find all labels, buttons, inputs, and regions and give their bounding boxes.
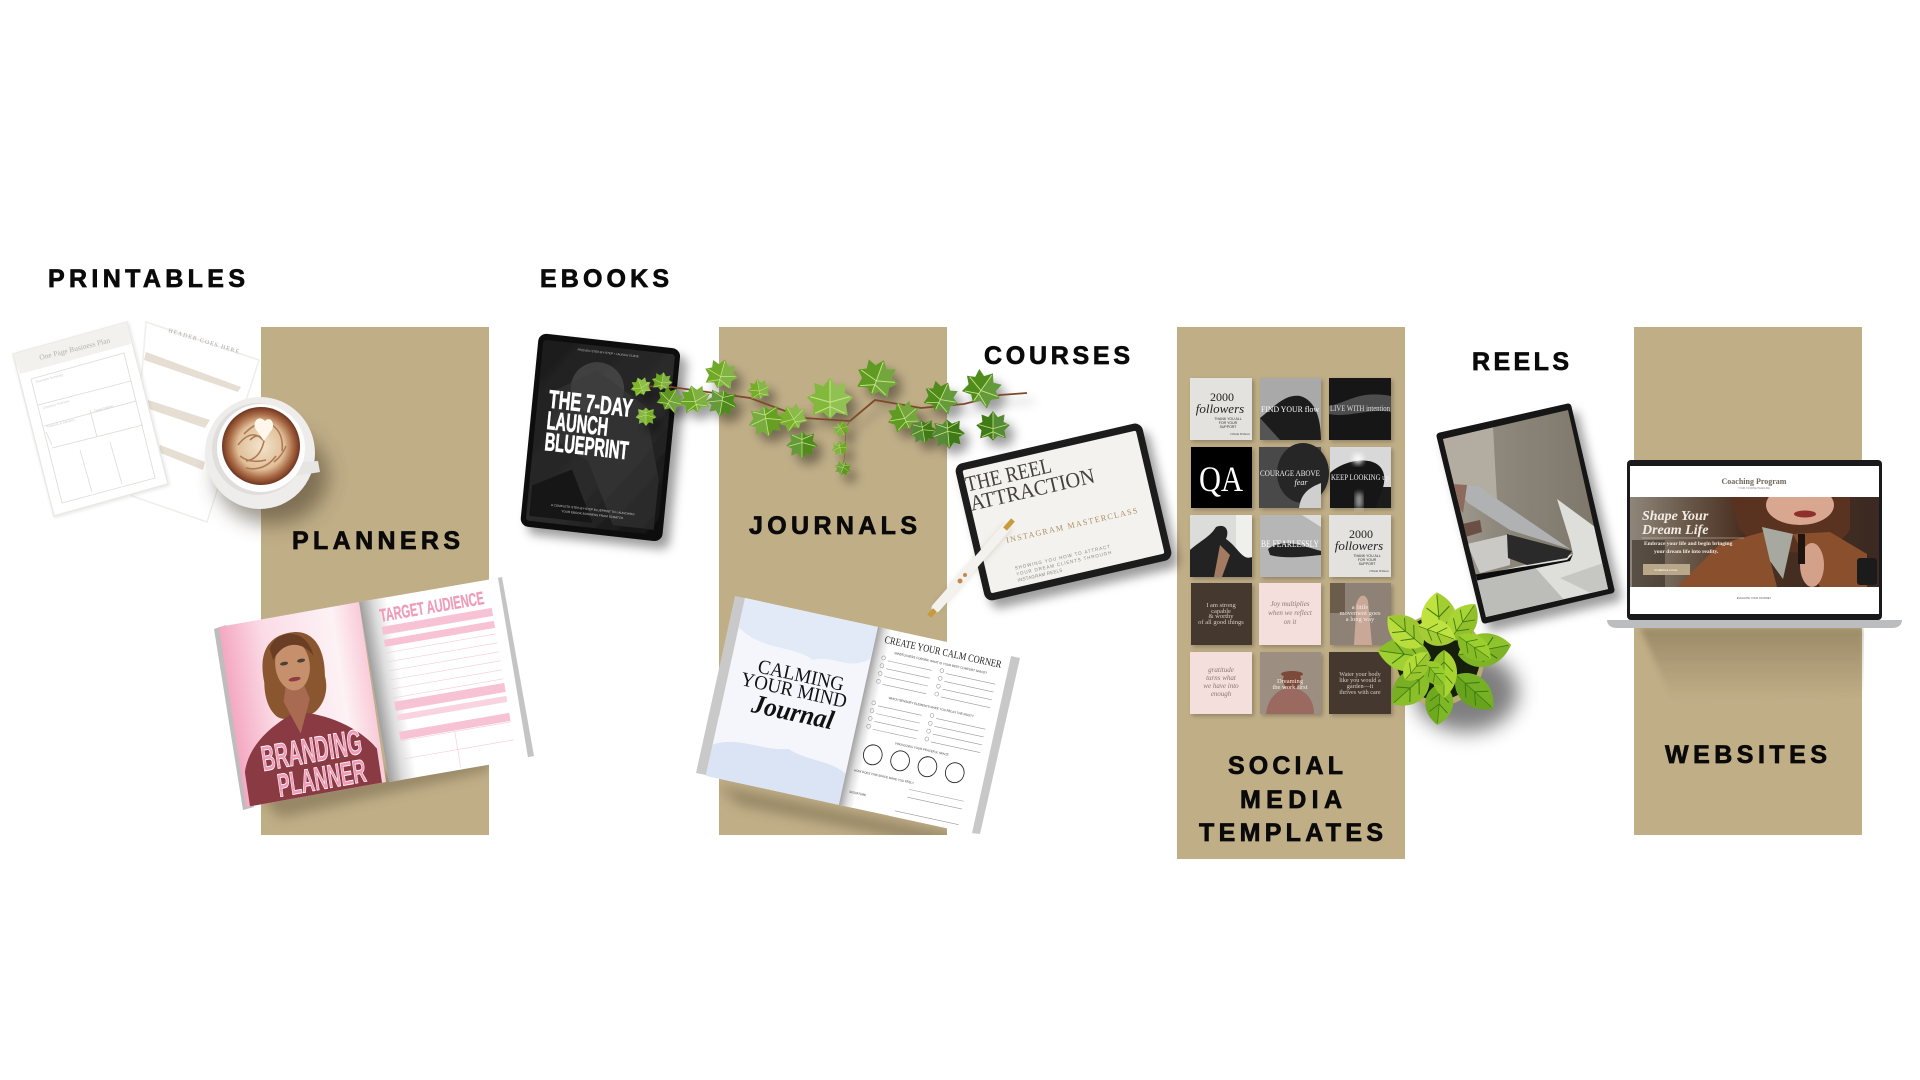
tile: courage above fear: fear (1295, 478, 1308, 487)
planner left page (219, 602, 387, 810)
laptop screen: Embrace your life and begin bringing (1644, 541, 1733, 547)
tile: 2000 followers repeat: SUPPORT (1359, 562, 1376, 566)
tile: I am strong: of all good things (1198, 619, 1244, 626)
heading: reels: REELS (1472, 348, 1569, 376)
tile: live with intention: LIVE WITH intention (1330, 403, 1391, 413)
tile: 2000 followers: Olivia Wilson (1230, 432, 1250, 436)
icon: pen (929, 520, 1013, 616)
tile: joy multiplies: on it (1284, 618, 1297, 626)
heading: websites: WEBSITES (1665, 741, 1827, 769)
journal right page: WHICH SENSORY ELEMENTS MAKE YOU RELAX THE MOST? (888, 696, 974, 718)
tile: courage above fear: COURAGE ABOVE (1260, 468, 1320, 478)
ebook tablet mockup: LAUNCH (545, 407, 609, 442)
printable sheet: business plan: Products & Services (46, 418, 75, 429)
tile: water your body: Water your body (1339, 671, 1382, 678)
hero photo (1630, 497, 1879, 587)
tile: 2000 followers: 2000 (1210, 390, 1234, 404)
journal left page (706, 598, 878, 805)
courses tablet mockup: YOUR DREAM CLIENTS THROUGH (1016, 550, 1112, 577)
heading: planners: PLANNERS (292, 527, 460, 555)
printable sheet: back: HEADER GOES HERE (167, 328, 241, 356)
panel: journals backdrop (719, 327, 947, 835)
courses tablet mockup: THE REEL (963, 453, 1054, 497)
printable sheet: business plan: One Page Business Plan (38, 336, 111, 362)
printable sheet: business plan (13, 322, 168, 516)
tile: gratitude: enough (1211, 690, 1232, 698)
printable sheet: business plan: Company Overview (42, 399, 71, 410)
courses tablet mockup (954, 422, 1173, 602)
planner right page (359, 578, 528, 782)
tile: 2000 followers (1190, 378, 1252, 440)
reels tablet mockup (1430, 400, 1620, 625)
laptop screen: SCHEDULE A CALL (1654, 568, 1678, 572)
journal right page (839, 627, 1011, 834)
laptop screen: your dream life into reality. (1654, 549, 1719, 555)
website laptop mockup (1607, 460, 1902, 700)
planner left page: PLANNER (275, 753, 369, 804)
tile: 2000 followers repeat: FOR YOUR (1358, 558, 1377, 562)
tile: gratitude: we have into (1203, 682, 1239, 690)
tile: 2000 followers: FOR YOUR (1219, 421, 1238, 425)
heading: courses: COURSES (984, 342, 1130, 370)
planner left page: BRANDING (258, 722, 364, 779)
tile: water your body: garden—it (1347, 683, 1374, 690)
heading: social media templates: TEMPLATES (1199, 819, 1383, 847)
heading: social media templates: MEDIA (1240, 786, 1342, 814)
courses tablet mockup: INSTAGRAM MASTERCLASS (1005, 506, 1138, 545)
printable sheet: back (132, 322, 259, 522)
planner shadow (260, 756, 490, 818)
printable sheet: business plan: Target Market (93, 404, 113, 413)
tile: be fearlessly: BE FEARLESSLY (1261, 539, 1319, 549)
tile: water your body (1329, 652, 1391, 714)
laptop base (1607, 620, 1902, 628)
heading: ebooks: EBOOKS (540, 265, 669, 293)
journal mockup (696, 596, 1020, 848)
tile: find your flow (1260, 378, 1321, 440)
journal left page: Journal (748, 688, 837, 736)
ebook tablet mockup: YOUR EBOOK BUSINESS FROM SCRATCH (561, 509, 623, 520)
tile: I am strong: & worthy (1208, 613, 1234, 620)
panel: websites backdrop (1634, 327, 1862, 835)
tile: Q and A (1191, 447, 1252, 508)
tile: courage above fear (1259, 443, 1329, 508)
tile: I am strong: capable (1211, 608, 1231, 615)
heading: social media templates (1199, 752, 1383, 847)
planner right page: TARGET AUDIENCE (378, 587, 485, 626)
tile: 2000 followers repeat: followers (1335, 538, 1383, 553)
journal left page: YOUR MIND (739, 669, 849, 713)
tile: dreaming (1260, 652, 1321, 714)
ebook tablet mockup: PROVEN STEP-BY-STEP • LAUNCH GUIDE (577, 348, 639, 359)
tile: a little movement: movement goes (1340, 610, 1381, 617)
heading: printables: PRINTABLES (48, 265, 245, 293)
laptop shadow (1640, 628, 1864, 691)
journal left page: CALMING (756, 656, 846, 696)
journal right page: CREATE YOUR CALM CORNER (883, 635, 1003, 671)
tile: keep looking up (1330, 447, 1391, 508)
printables mockup (13, 322, 259, 522)
courses tablet mockup: INSTAGRAM REELS (1017, 568, 1063, 583)
ebook tablet mockup (520, 333, 681, 542)
tile: 2000 followers: THANK YOU ALL (1214, 417, 1242, 421)
planner mockup (214, 577, 534, 818)
tile: gratitude: gratitude (1208, 666, 1234, 674)
ivy vine (628, 353, 1027, 478)
tile: be fearlessly (1260, 515, 1321, 577)
tile: gratitude: turns what (1206, 674, 1237, 682)
social media template grid (1190, 378, 1391, 714)
tile: gratitude (1190, 652, 1252, 714)
ebook tablet mockup: A COMPLETE STEP-BY-STEP BLUEPRINT TO LAUNCHING (551, 503, 635, 516)
laptop screen: Shape Your (1642, 509, 1709, 524)
tile: Q and A: QA (1199, 459, 1243, 499)
laptop screen (1627, 460, 1882, 620)
printable sheet: business plan: Executive Summary (35, 373, 64, 384)
tile: joy multiplies: Joy multiplies (1270, 600, 1310, 608)
journal right page: HOW DOES THIS SPACE MAKE YOU FEEL? (854, 768, 914, 785)
laptop screen: Coaching Program (1722, 477, 1787, 486)
tile: water your body: like you would a (1339, 677, 1381, 684)
laptop screen: Dream Life (1641, 523, 1708, 538)
tile: joy multiplies (1259, 583, 1321, 645)
tile: 2000 followers: SUPPORT (1220, 425, 1237, 429)
courses tablet mockup: ATTRACTION (967, 463, 1097, 516)
tile: a little movement: a little (1352, 604, 1368, 611)
tile: find your flow: FIND YOUR flow (1261, 404, 1320, 414)
journal right page: MINDFULNESS CORNER: WHAT IS YOUR BEST COMFORT SPACE? (894, 651, 988, 675)
journal shadow (720, 784, 947, 835)
reels tablet photo (1443, 410, 1608, 617)
panel: planners backdrop (261, 327, 489, 835)
ebook tablet mockup: BLUEPRINT (543, 428, 630, 465)
tile: joy multiplies: when we reflect (1268, 609, 1313, 617)
tile: 2000 followers repeat: THANK YOU ALL (1353, 554, 1381, 558)
tile: dreaming: Dreaming (1277, 678, 1304, 685)
icon: potted plant (1375, 591, 1518, 732)
tile: woman photo (1190, 515, 1252, 577)
heading: journals: JOURNALS (749, 512, 917, 540)
heading: social media templates: SOCIAL (1228, 752, 1343, 780)
icon: coffee cup (205, 397, 328, 524)
tile: live with intention (1329, 378, 1391, 440)
tile: a little movement: a long way (1346, 616, 1375, 623)
panel: social media templates backdrop (1177, 327, 1405, 859)
laptop screen: YOUR COURSE HEADLINE (1738, 487, 1770, 490)
journal right page: SIGNATURE (849, 790, 867, 797)
tile: 2000 followers repeat: Olivia Wilson (1369, 569, 1389, 573)
tile: 2000 followers repeat (1329, 515, 1391, 577)
tile: dreaming: the work first (1272, 684, 1308, 691)
ebook tablet mockup: THE 7-DAY (548, 386, 634, 423)
tile: 2000 followers repeat: 2000 (1349, 527, 1373, 541)
courses tablet mockup: SHOWING YOU HOW TO ATTRACT (1014, 544, 1111, 571)
tile: keep looking up: KEEP LOOKING up (1331, 473, 1389, 482)
tile: a little movement (1330, 583, 1391, 645)
tile: I am strong: I am strong (1206, 602, 1237, 609)
laptop screen: EVALUATE YOUR JOURNEY (1737, 596, 1771, 600)
tile: I am strong (1191, 583, 1252, 645)
tile: water your body: thrives with care (1339, 689, 1381, 696)
journal right page: VISUALIZING YOUR PEACEFUL SPACE (895, 741, 949, 757)
tile: 2000 followers: followers (1196, 401, 1244, 416)
